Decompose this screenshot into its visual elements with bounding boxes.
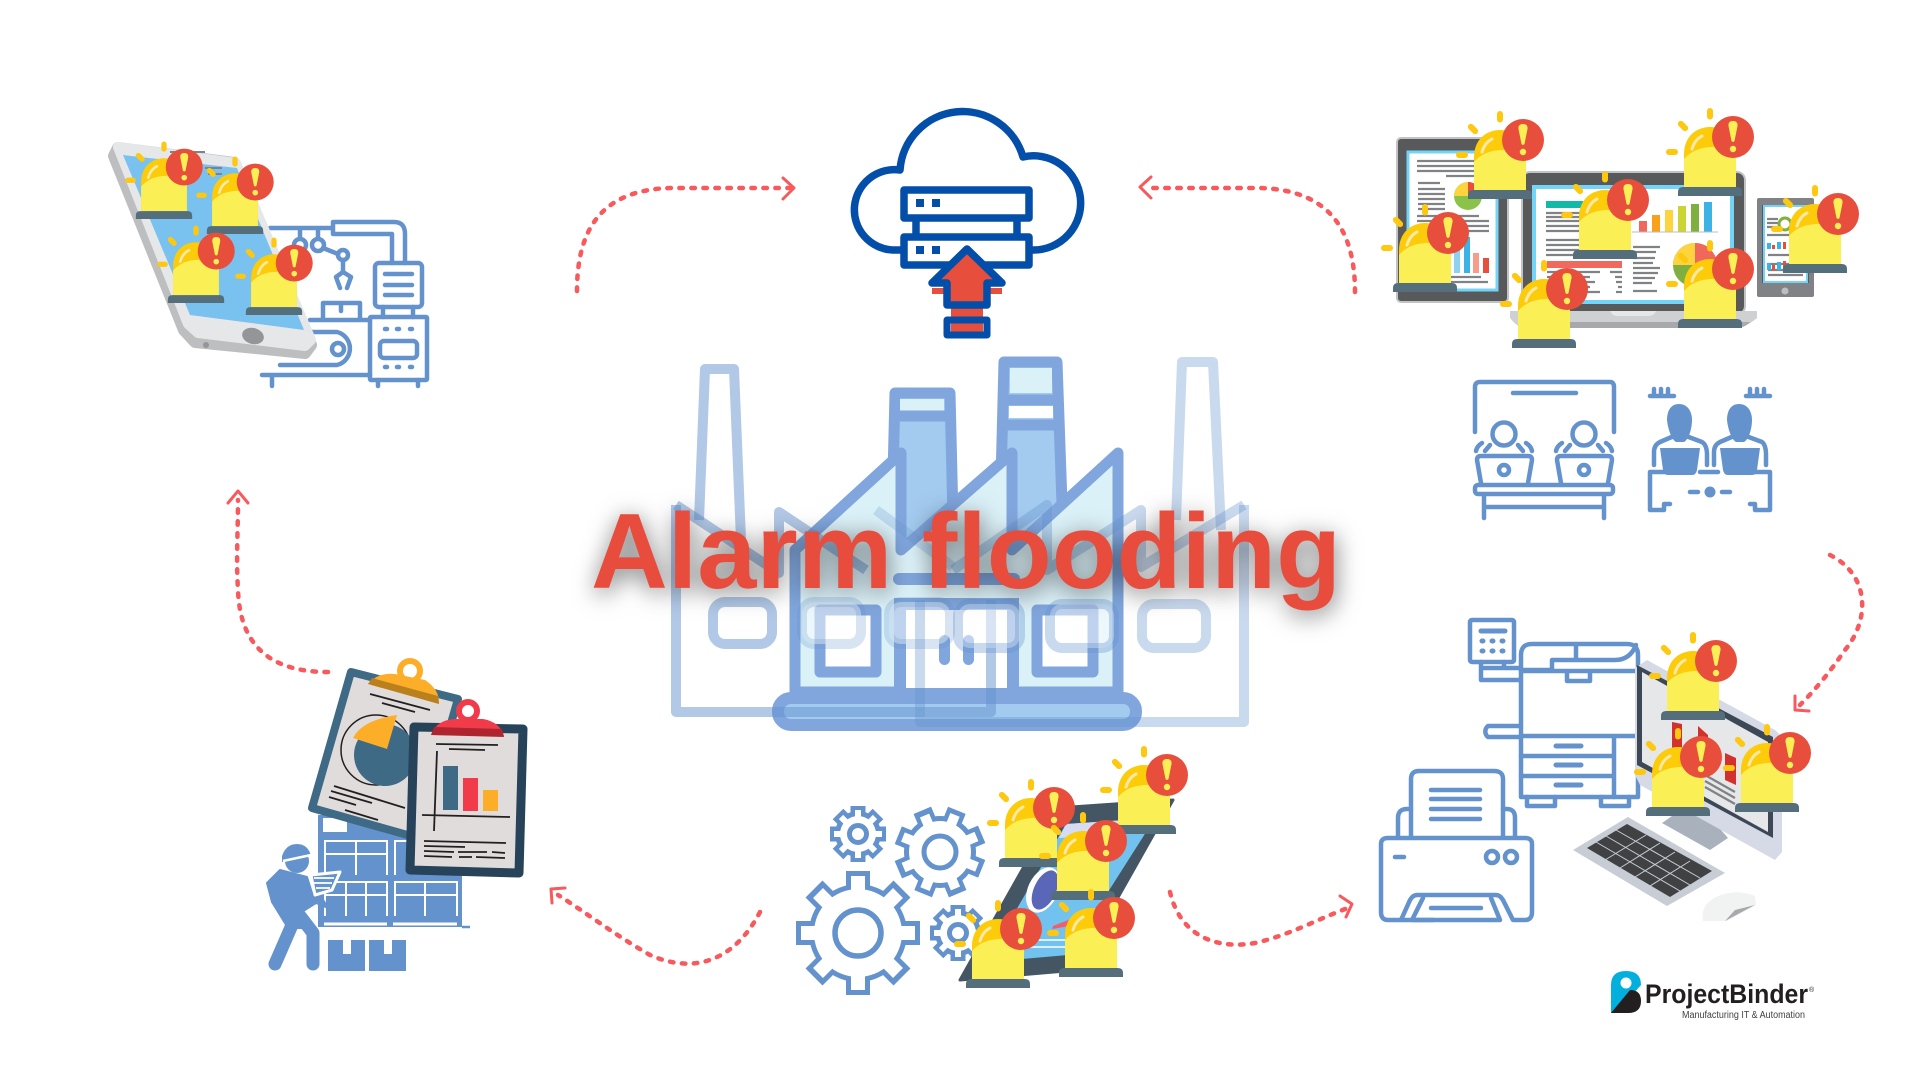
left back factory (676, 369, 991, 712)
icon: smartphone (114, 147, 311, 353)
alarms on computer (1634, 632, 1811, 816)
panel: printers and computer (1381, 620, 1811, 921)
icon: worker (267, 844, 340, 964)
server stack (904, 190, 1029, 265)
dotted arrow: to cloud from left (577, 178, 794, 291)
right back factory (920, 362, 1244, 722)
dotted arrow: bottom left (551, 888, 760, 964)
cloud server upload icon (854, 112, 1081, 335)
alarms on phone (125, 142, 313, 315)
panel: gears and tablet (796, 746, 1188, 995)
icon: small tablet (1757, 198, 1814, 297)
icon: tablet with report (1397, 138, 1508, 302)
icon: rear clipboard (312, 661, 458, 838)
icon: keyboard (1573, 817, 1725, 906)
brand name: ProjectBinder (1645, 979, 1808, 1009)
upload arrow (932, 249, 1002, 335)
central factory base (778, 698, 1136, 725)
icon: laptop with charts (1510, 172, 1757, 328)
logo: ProjectBinder (1611, 971, 1815, 1021)
icon: front clipboard (410, 702, 523, 873)
registered mark: ® (1809, 986, 1815, 994)
icon: copier (1470, 620, 1638, 806)
icon: robot arm production line (262, 222, 427, 386)
panel: robot arm and phone (114, 142, 427, 386)
central factory building (795, 453, 1118, 692)
icon: logo pin (1611, 971, 1641, 1013)
icon: warehouse racks (318, 815, 470, 927)
tagline: Manufacturing IT & Automation (1682, 1010, 1805, 1021)
cloud outline (854, 112, 1081, 250)
central factory chimneys (891, 362, 1064, 560)
factory illustration (676, 362, 1244, 725)
icon: operators at desks (1475, 382, 1770, 518)
dotted arrow: bottom right (1170, 892, 1352, 945)
icon: operators facing screen (1475, 382, 1614, 518)
icon: desktop monitor (1635, 660, 1782, 860)
title: Alarm flooding (591, 491, 1341, 611)
central factory door (899, 579, 1014, 694)
dotted arrow: left side up (228, 491, 328, 672)
dotted arrow: right side down (1795, 555, 1862, 711)
dotted arrow: to cloud from right (1140, 177, 1355, 292)
panel: dashboards on screens (1381, 108, 1859, 348)
icon: boxes (328, 940, 406, 971)
icon: printer (1381, 771, 1532, 920)
icon: mouse (1703, 892, 1756, 921)
icon: operators with laptops (1650, 389, 1770, 510)
panel: reports and warehouse (267, 661, 523, 971)
alarms on tablet (954, 746, 1188, 988)
central factory windows (820, 610, 1093, 672)
alarms on screens (1381, 108, 1859, 348)
icon: tablet (960, 800, 1173, 980)
icon: gears (796, 793, 999, 995)
